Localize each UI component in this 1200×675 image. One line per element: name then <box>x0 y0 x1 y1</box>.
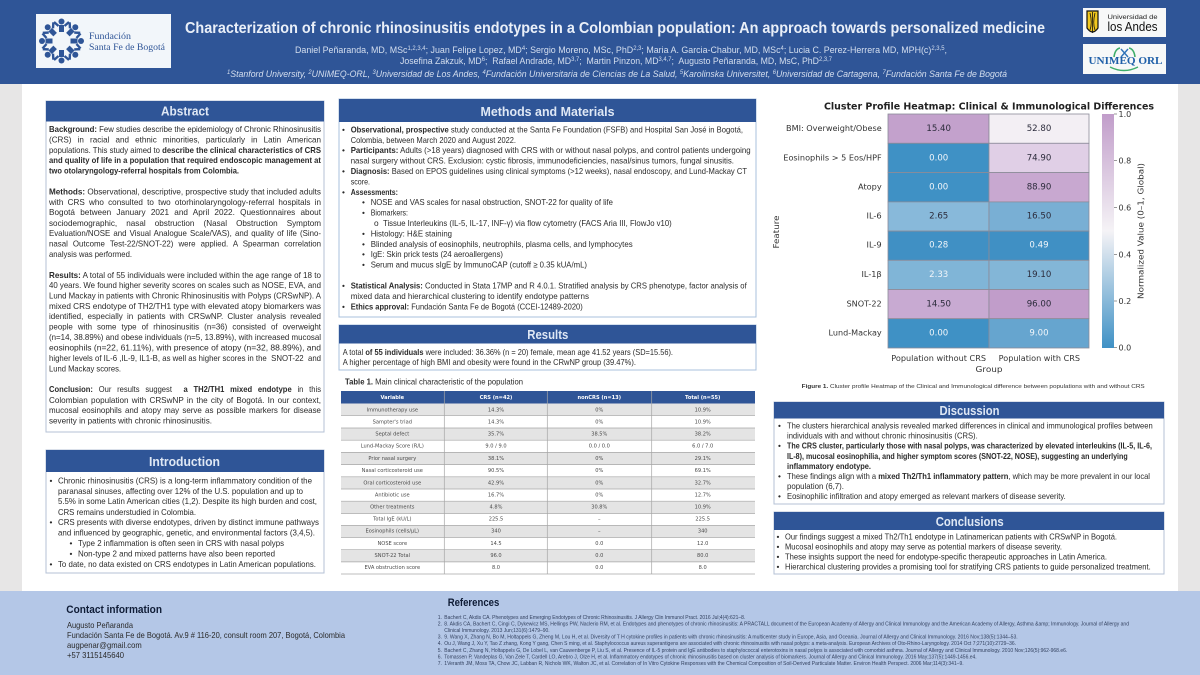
heading: results <box>339 325 756 344</box>
logo: UNIMEQ ORL <box>1083 44 1166 74</box>
axis labels: Group <box>976 365 1002 374</box>
table 1: main clinical characteristics: 225.5 <box>695 517 710 523</box>
heading: results: Results <box>527 327 568 342</box>
text: methods summary: nasal Outcome Test-22/SNOT-22) were applied. A Spearman correlation <box>49 238 321 248</box>
introduction bullets: Type 2 inflammation is often seen in CRS with nasal polyps <box>78 538 284 548</box>
heatmap values: 74.90 <box>1027 153 1051 163</box>
colour bar legend: 0.2 <box>1118 297 1131 306</box>
affiliations: Fundación Universitaria de Ciencias de La Salud, <box>486 69 680 79</box>
table caption: Table 1. Main clinical characteristic of the population <box>345 377 523 387</box>
text: results summary: mixed CRS endotype of TH2/TH1 type with elevated atopy biomarkers was <box>49 301 321 311</box>
discussion bullets: The CRS cluster, particularly those with nasal polyps, was characterized by elevated interleukins (IL-5, IL-6, <box>787 440 1152 450</box>
affiliations: 4 <box>482 70 486 76</box>
statistical analysis and ethics <box>342 280 747 312</box>
assessments sub-list: • <box>362 208 365 218</box>
heading: introduction: Introduction <box>149 454 220 469</box>
heading: abstract: Abstract <box>161 104 210 119</box>
text: results summary: Lund Mackay in patients with Chronic Rhinosinusitis with Polyps (CRSwNP). A <box>49 290 321 300</box>
table 1: main clinical characteristics: nonCRS (n=13) <box>578 395 621 401</box>
discussion bullets: IL-8), mucosal eosinophilia, and higher symptom scores (SNOT-22, NOSE), suggesting an underlying <box>787 451 1128 461</box>
table 1: main clinical characteristics: 38.1% <box>488 456 504 462</box>
introduction bullets: 5.5% in some Latin American cities (1,2). Despite its high burden and cost, <box>58 496 317 506</box>
table 1: main clinical characteristics: 69.1% <box>695 468 711 474</box>
assessments sub-list: • <box>362 197 365 207</box>
header banner <box>0 0 1200 84</box>
feature labels <box>783 124 882 338</box>
references: 7. <box>438 661 442 667</box>
methods bullets: Assessments: <box>351 187 398 197</box>
references: 4. <box>438 641 442 647</box>
introduction bullets: • <box>50 517 52 527</box>
authors: 4 <box>522 46 526 52</box>
authors: 2,3,7 <box>819 57 833 63</box>
table 1: main clinical characteristics: 29.1% <box>695 456 711 462</box>
logo: UNIMEQ ORL: UNIMEQ ORL <box>1088 56 1162 67</box>
text: results summary: eosinophils (n=22, 61.11%), with presence of atopy (n=32, 88.89%), and <box>49 342 321 352</box>
figure caption: Figure 1. Cluster profile Heatmap of the Clinical and Immunological difference between populations with and without CRS <box>802 384 1145 390</box>
affiliations: UNIMEQ-ORL, <box>312 69 372 79</box>
table 1: main clinical characteristics: NOSE score <box>378 541 407 547</box>
table 1: main clinical characteristics: Antibiotic use <box>375 492 410 498</box>
methods bullets: Colombia, between March 2020 and August 2022. <box>351 135 516 145</box>
affiliations: Stanford University, <box>230 69 308 79</box>
assessments sub-list: Histology: H&E staining <box>371 228 452 238</box>
assessments sub-list: • <box>362 260 365 270</box>
table 1: main clinical characteristics: Nasal corticosteroid use <box>362 468 423 474</box>
introduction bullets: Chronic rhinosinusitis (CRS) is a long-term inflammatory condition of the <box>58 476 312 486</box>
table 1: main clinical characteristics: 35.7% <box>488 432 504 438</box>
text: results summary: (n=14, 38.89%) and obese individuals (n=5, 13.89%), with increased mucosal <box>49 332 321 342</box>
table 1: main clinical characteristics: 14.3% <box>488 407 504 413</box>
conclusions bullets: Mucosal eosinophils and atopy may serve as potential markers of disease severity. <box>785 541 1062 551</box>
table 1: main clinical characteristics: Lund-Mackay Score (R/L) <box>361 444 424 450</box>
affiliations: Universidad de Los Andes, <box>376 69 482 79</box>
affiliations: Universidad de Cartagena, <box>776 69 883 79</box>
references: Tomassen P, Vandeplas G, Van Zele T, Cardell LO, Arebro J, Olze H, et al. Inflammatory endotypes of chronic rhinosinusitis based on cluster analysis of biomarkers. Journal of Allergy and Clinical Immunology. 2016 May;137(5):1449-1456.e4. <box>444 655 977 661</box>
methods bullets: nasal surgery without CRS. Exclusion: cystic fibrosis, immunodeficiencies, nasal/sinus tumors, fungal sinusitis. <box>351 156 734 166</box>
authors: , <box>945 45 947 55</box>
text: background: Background: Few studies describe the epidemiology of Chronic Rhinosinusitis <box>49 124 321 134</box>
colour bar legend: 0.4 <box>1118 250 1131 259</box>
table 1: main clinical characteristics: Prior nasal surgery <box>368 456 416 462</box>
table 1: main clinical characteristics: Total (n=55) <box>685 395 720 401</box>
panel: results <box>339 325 756 370</box>
colour bar legend: 0.6 <box>1118 204 1131 213</box>
title: Characterization of chronic rhinosinusitis endotypes in a Colombian population: An approach towards personalized medicine <box>185 20 1045 37</box>
results text: A higher percentage of high BMI and obesity were found in the CRwNP group (39.47%). <box>343 357 636 367</box>
results text <box>343 347 673 367</box>
authors: ; Maria A. Garcia-Chabur, MD, MSc <box>641 45 781 55</box>
heatmap cells <box>888 114 1089 348</box>
text: methods summary: Evaluation/NOSE and Visual Analogue Scale/VAS), and quality of life (Sino- <box>49 228 321 238</box>
colour bar legend: Normalized Value (0–1, Global) <box>1136 163 1146 299</box>
introduction bullets: • <box>50 476 52 486</box>
table 1: main clinical characteristics: 42.9% <box>488 480 504 486</box>
contact information: +57 3115145640 <box>67 650 124 660</box>
authors: 1,2,3,4 <box>408 46 426 52</box>
text: background: (CRS) in racial and ethnic minorities, particularly in Latin American <box>49 134 321 144</box>
references: Ou J, Wang J, Xu Y, Tao Z zhang, Kong Y gang, Chen S ming, et al. Staphylococcus aureus superantigens are associated with chronic rhinosinusitis with nasal polyps: a meta-analysis. European Archives of Oto-Rhino-Laryngology. 2014 Oct 7;271(10):2729–36. <box>444 641 1016 647</box>
table 1: main clinical characteristics: 0.0 / 0.0 <box>589 444 610 450</box>
methods bullets: • <box>342 145 345 155</box>
table 1: main clinical characteristics: 96.0 <box>490 553 502 559</box>
text: methods summary: with CRS who consulted to two otorhinolaryngology-referral hospitals in <box>48 197 321 207</box>
heading: introduction <box>46 450 324 472</box>
conclusions bullets: These insights support the need for endotype-specific therapeutic approaches in Latin America. <box>785 551 1107 561</box>
feature labels: Atopy <box>858 183 882 192</box>
methods bullets: • <box>342 187 345 197</box>
contact information: Fundación Santa Fe de Bogotá. Av.9 # 116-20, consult room 207, Bogotá, Colombia <box>67 630 345 640</box>
introduction bullets: To date, no data existed on CRS endotypes in Latin American populations. <box>58 559 316 569</box>
authors: 6 <box>482 57 486 63</box>
heading: methods and materials <box>339 99 756 122</box>
text: conclusion summary: severity in patients with chronic rhinosinusitis. <box>49 416 212 426</box>
table 1: main clinical characteristics: 12.7% <box>695 492 711 498</box>
panel: conclusions <box>774 512 1164 574</box>
table 1: main clinical characteristics: 14.3% <box>488 419 504 425</box>
authors: 4 <box>781 46 784 52</box>
authors: ; Sergio Moreno, MSc, PhD <box>525 45 634 55</box>
table 1: main clinical characteristics: 0% <box>595 456 603 462</box>
assessments sub-list: Biomarkers: <box>371 208 408 218</box>
references: Bachert C, Akdis CA. Phenotypes and Emerging Endotypes of Chronic Rhinosinusitis. J Allergy Clin Immunol Pract. 2016 Jul;4(4):621–8. <box>444 615 745 621</box>
feature labels: SNOT-22 <box>846 300 882 309</box>
references: Clinical Immunology. 2013 Jun;131(6):1479–90. <box>444 628 550 634</box>
heatmap values: 96.00 <box>1027 300 1051 310</box>
statistical analysis and ethics: mixed data and hierarchical clustering to identify endotype patterns <box>351 291 589 301</box>
references: 9. Wang X, Zhang N, Bo M, Holtappels G, Zheng M, Lou H, et al. Diversity of T H cytokine profiles in patients with chronic rhinosinusitis: A multicenter study in Europe, Asia, and Oceania. Journal of Allergy and Clinical Immunology. 2016 Nov;138(5):1344–53. <box>444 634 1018 640</box>
references: References <box>448 597 499 609</box>
table 1: main clinical characteristics: 4.8% <box>490 505 503 511</box>
logo: Universidad de los Andes <box>1083 8 1166 37</box>
panel: introduction <box>46 450 324 573</box>
references: 1Veranth JM, Moss TA, Chow JC, Labban R, Nichols WK, Walton JC, et al. Correlation of In Vitro Cytokine Responses with the Chemical Composition of Soil-Derived Particulate Matter. Environ Health Perspect. 2006 Mar;114(3):341–9. <box>444 661 964 667</box>
table 1: main clinical characteristics: 14.5 <box>490 541 502 547</box>
discussion bullets: Eosinophilic infiltration and atopy emerged as relevant markers of disease severity. <box>787 491 1066 501</box>
table 1: main clinical characteristics: 340 <box>491 529 501 535</box>
methods bullets: • <box>342 166 345 176</box>
logo: Fundación Santa Fe de Bogotá: Fundación <box>89 31 132 41</box>
introduction bullets <box>50 476 319 569</box>
table 1: main clinical characteristics: Immunotherapy use <box>367 407 418 413</box>
heatmap values: 19.10 <box>1027 270 1051 280</box>
heading: conclusions: Conclusions <box>936 514 1004 529</box>
table 1: main clinical characteristics: 340 <box>698 529 708 535</box>
methods bullets <box>342 124 751 197</box>
table 1: main clinical characteristics: 0% <box>595 407 603 413</box>
authors: 3,4,7 <box>659 57 672 63</box>
discussion bullets: • <box>778 420 781 430</box>
authors: Daniel Peñaranda, MD, MSc <box>295 45 409 55</box>
table 1: main clinical characteristics: 0.0 <box>595 553 603 559</box>
references <box>438 597 1129 667</box>
panel: discussion <box>774 402 1164 504</box>
table 1: main clinical characteristics: 16.7% <box>488 492 504 498</box>
heatmap values: 0.00 <box>929 153 948 163</box>
colour bar legend: 1.0 <box>1118 110 1131 119</box>
text: conclusion summary: mucosal eosinophils and atopy may serve as possible markers for disease <box>49 405 321 415</box>
table 1: main clinical characteristics: Variable <box>380 395 405 401</box>
table 1: main clinical characteristics: 38.2% <box>695 432 711 438</box>
heading: discussion: Discussion <box>940 403 1000 418</box>
side strip left <box>0 84 22 591</box>
text: conclusion summary: Colombian population with CRSwNP in the city of Bogotá. In our context, <box>49 395 321 405</box>
statistical analysis and ethics: Ethics approval: Fundación Santa Fe de Bogotá (CCEI-12489-2020) <box>351 302 583 312</box>
table 1: main clinical characteristics: 32.7% <box>695 480 711 486</box>
affiliations: 5 <box>680 70 684 76</box>
footer band <box>0 591 1200 675</box>
heatmap values: 2.33 <box>929 270 948 280</box>
text: methods summary: Bogotá between January 2021 and April 2022. Questionnaires about <box>49 207 322 217</box>
text: conclusion summary: Conclusion: Our results suggest a TH2/TH1 mixed endotype in this <box>49 384 321 394</box>
table 1: main clinical characteristics: 0% <box>595 468 603 474</box>
contact information: Contact information <box>66 604 162 616</box>
heatmap values: 0.28 <box>929 241 948 251</box>
feature labels: Lund-Mackay <box>828 329 882 338</box>
discussion bullets: • <box>778 440 781 450</box>
introduction bullets: • <box>70 538 72 548</box>
affiliations: 2 <box>307 70 312 76</box>
panel: abstract <box>46 101 324 432</box>
logo: Universidad de los Andes: Universidad de <box>1108 14 1158 21</box>
table 1: main clinical characteristics: Eosinophils (cells/µL) <box>366 529 419 535</box>
table 1: main clinical characteristics: Other treatments <box>370 505 415 511</box>
authors: Josefina Zakzuk, MD <box>400 56 484 66</box>
text: background: populations. This study aimed to describe the clinical characteristics of CRS <box>49 145 321 155</box>
table 1: main clinical characteristics: 225.5 <box>489 517 503 523</box>
contact information: Augusto Peñaranda <box>67 620 133 630</box>
affiliations: 7 <box>883 70 886 76</box>
heatmap values: 52.80 <box>1027 124 1051 134</box>
authors: 2,3 <box>633 46 642 52</box>
table 1: main clinical characteristics: 0.0 <box>595 541 603 547</box>
table 1: main clinical characteristics: Total IgE (kU/L) <box>372 517 411 523</box>
introduction bullets: • <box>50 559 52 569</box>
text: results summary: people with some type of rhinosinusitis (n=36) consisted of overweight <box>49 322 322 332</box>
text: results summary <box>49 270 322 374</box>
table 1: main clinical characteristics: 9.0 / 9.0 <box>485 444 507 450</box>
affiliations: Fundación Santa Fe de Bogotá <box>886 69 1007 79</box>
introduction bullets: CRS presents with diverse endotypes, driven by distinct immune pathways <box>58 517 319 527</box>
conclusions bullets: • <box>776 551 780 561</box>
table 1: main clinical characteristics: 6.0 / 7.0 <box>692 444 713 450</box>
affiliations: Karolinska Universitet, <box>683 69 773 79</box>
discussion bullets: inflammatory endotype. <box>787 461 871 471</box>
affiliations: 6 <box>773 70 777 76</box>
table 1: main clinical characteristics: 10.9% <box>695 505 711 511</box>
introduction bullets: and influenced by geographic, genetic, and environmental factors (3,4,5). <box>58 528 315 538</box>
side strip right <box>1178 84 1200 591</box>
references: 6. <box>438 655 442 661</box>
table 1: main clinical characteristics: CRS (n=42) <box>480 395 512 401</box>
text: results summary: 40 years. We found higher severity scores on scales such as NOSE, EVA, and <box>49 280 321 290</box>
text: methods summary: Methods: Observational, descriptive, prospective study that included adults <box>49 186 321 196</box>
feature labels: BMI: Overweight/Obese <box>786 124 882 133</box>
discussion bullets: population (6,7). <box>787 481 844 491</box>
table 1: main clinical characteristics: 0% <box>595 492 603 498</box>
results text: A total of 55 individuals were included: 36.36% (n = 20) female, mean age 41.52 years (SD=15.56). <box>343 347 673 357</box>
references: 8. Akdis CA, Bachert C, Cingi C, Dykewicz MS, Hellings PW, Naclerio RM, et al. Endotypes and phenotypes of chronic rhinosinusitis: A PRACTALL document of the European Academy of Allergy and Clinical Immunology and the American Academy of Allergy, Asthma &amp; Immunology. Journal of Allergy and <box>444 622 1129 628</box>
heatmap values: 14.50 <box>926 300 951 310</box>
table 1: main clinical characteristics: 0% <box>595 419 603 425</box>
text: conclusion summary <box>49 384 321 426</box>
table 1: main clinical characteristics: 90.5% <box>488 468 504 474</box>
authors: 2,3,5 <box>931 46 945 52</box>
affiliations: 3 <box>372 70 376 76</box>
methods bullets: Observational, prospective study conducted at the Santa Fe Foundation (FSFB) and Hospital San José in Bogotá, <box>351 124 743 134</box>
table 1: main clinical characteristics: 0.0 <box>595 565 603 571</box>
panel: methods and materials <box>339 99 756 317</box>
text: results summary: identified, especially in patients with CRSwNP. Cluster analysis revealed <box>49 311 321 321</box>
table 1: main clinical characteristics: Septal defect <box>375 432 409 438</box>
heading: methods and materials: Methods and Materials <box>480 104 614 119</box>
conclusions bullets: Our findings suggest a mixed Th2/Th1 endotype in Latinamerican patients with CRSwNP in Bogotá. <box>785 531 1117 541</box>
table 1: main clinical characteristics <box>341 391 755 574</box>
text: results summary: Lund Mackay scores. <box>49 364 121 374</box>
conclusions bullets: • <box>776 561 780 571</box>
heading: conclusions <box>774 512 1164 530</box>
heatmap values: 9.00 <box>1029 329 1049 339</box>
heading: abstract <box>46 101 324 122</box>
heatmap values: 0.00 <box>929 329 948 339</box>
feature labels: IL-1β <box>862 270 882 279</box>
axis labels: Population without CRS <box>891 354 986 363</box>
references: 1. <box>438 615 442 621</box>
affiliations: 1 <box>227 70 230 76</box>
table 1: main clinical characteristics: 0% <box>595 480 603 486</box>
conclusions bullets: Hierarchical clustering provides a promising tool for stratifying CRS patients to guide personalized treatment. <box>785 561 1151 571</box>
table 1: main clinical characteristics: SNOT-22 Total <box>375 553 410 559</box>
conclusions bullets <box>776 531 1151 571</box>
introduction bullets: CRS remains understudied in Colombia. <box>58 507 196 517</box>
references: Bachert C, Zhang N, Holtappels G, De Lobel L, van Cauwenberge P, Liu S, et al. Presence of IL-5 protein and IgE antibodies to staphylococcal enterotoxins in nasal polyps is associated with comorbid asthma. Journal of Allergy and Clinical Immunology. 2010 Nov;126(5):962-968.e6. <box>444 648 1067 654</box>
logo: Universidad de los Andes: los Andes <box>1108 19 1158 34</box>
assessments sub-list: Tissue Interleukins (IL-5, IL-17, INF-γ) via flow cytometry (FACS Aria III, FlowJo v10) <box>383 218 672 228</box>
statistical analysis and ethics: • <box>342 280 345 290</box>
feature labels: Eosinophils > 5 Eos/HPF <box>783 153 882 162</box>
feature labels: IL-9 <box>866 241 882 250</box>
text: background: and quality of life in a population that required endoscopic management at <box>49 155 321 165</box>
references: 3. <box>438 634 442 640</box>
introduction bullets: paranasal sinuses, affecting over 12% of the U.S. population and up to <box>58 486 303 496</box>
text: background <box>49 124 321 176</box>
text: results summary: higher levels of IL-6 ,IL-9, IL1-B, as well as higher scores in the SNOT-22 and <box>49 353 321 363</box>
introduction bullets: Non-type 2 and mixed patterns have also been reported <box>78 548 275 558</box>
table 1: main clinical characteristics: 8.0 <box>492 565 500 571</box>
authors: ; Lucia C. Perez-Herrera MD, MPH(c) <box>784 45 931 55</box>
table 1: main clinical characteristics: Oral corticosteroid use <box>363 480 421 486</box>
table 1: main clinical characteristics: 10.9% <box>695 407 711 413</box>
heatmap values: 16.50 <box>1027 212 1051 222</box>
conclusions bullets: • <box>776 531 780 541</box>
authors: 3,7 <box>571 57 580 63</box>
colour bar legend: 0.8 <box>1118 157 1131 166</box>
conclusions bullets: • <box>776 541 780 551</box>
assessments sub-list: Serum and mucus sIgE by ImmunoCAP (cutoff ≥ 0.35 kUA/mL) <box>371 260 587 270</box>
heatmap values: 0.00 <box>929 183 948 193</box>
discussion bullets: These findings align with a mixed Th2/Th1 inflammatory pattern, which may be more prevalent in our local <box>787 471 1150 481</box>
authors <box>295 45 947 66</box>
discussion bullets: • <box>778 491 781 501</box>
table 1: main clinical characteristics: 10.9% <box>695 419 711 425</box>
table 1: main clinical characteristics: – <box>598 529 601 535</box>
assessments sub-list: NOSE and VAS scales for nasal obstruction, SNOT-22 for quality of life <box>371 197 613 207</box>
assessments sub-list: o <box>374 218 379 228</box>
logo: Fundación Santa Fe de Bogotá: Santa Fe de Bogotá <box>89 42 165 52</box>
references: 2. <box>438 622 442 628</box>
heatmap values: 88.90 <box>1027 183 1051 193</box>
text: methods summary <box>48 186 322 259</box>
colour bar legend <box>1102 110 1146 353</box>
axis labels <box>772 215 1080 374</box>
assessments sub-list: Blinded analysis of eosinophils, neutrophils, plasma cells, and lymphocytes <box>371 239 633 249</box>
authors: ; Augusto Peñaranda, MD, MsC, PhD <box>672 56 819 66</box>
table 1: main clinical characteristics: 38.5% <box>591 432 608 438</box>
heatmap values: 15.40 <box>926 124 951 134</box>
methods bullets: • <box>342 124 345 134</box>
assessments sub-list <box>362 197 672 270</box>
axis labels: Feature <box>772 215 781 248</box>
statistical analysis and ethics: • <box>342 302 345 312</box>
introduction bullets: • <box>70 548 72 558</box>
text: results summary: Results: A total of 55 individuals were included within the age range of 18 to <box>49 270 321 280</box>
heading: discussion <box>774 402 1164 418</box>
table 1: main clinical characteristics: 8.0 <box>699 565 707 571</box>
table 1: main clinical characteristics: 80.0 <box>697 553 708 559</box>
heatmap values: 2.65 <box>929 212 948 222</box>
text: methods summary: analysis was performed. <box>49 249 132 259</box>
table 1: main clinical characteristics: 30.8% <box>591 505 608 511</box>
feature labels: IL-6 <box>866 212 882 221</box>
heatmap values: 0.49 <box>1029 241 1049 251</box>
chart: cluster profile heatmap <box>772 102 1154 374</box>
assessments sub-list: IgE: Skin prick tests (24 aeroallergens) <box>371 249 503 259</box>
table 1: main clinical characteristics: EVA obstruction score <box>364 565 420 571</box>
authors: ; Juan Felipe Lopez, MD <box>426 45 522 55</box>
statistical analysis and ethics: Statistical Analysis: Conducted in Stata 17MP and R 4.0.1. Stratified analysis by CRS phenotype, factor analysis of <box>351 280 747 290</box>
contact information: augpenar@gmail.com <box>67 640 142 650</box>
axis labels: Population with CRS <box>999 354 1080 363</box>
methods bullets: Participants: Adults (>18 years) diagnosed with CRS with or without nasal polyps, and control patients undergoing <box>351 145 751 155</box>
discussion bullets: The clusters hierarchical analysis revealed marked differences in clinical and immunological profiles between <box>787 420 1153 430</box>
discussion bullets: • <box>778 471 781 481</box>
table 1: main clinical characteristics: Sampter's triad <box>373 419 412 425</box>
discussion bullets <box>778 420 1153 501</box>
discussion bullets: individuals with and without chronic rhinosinusitis (CRS). <box>787 430 978 440</box>
authors: ; Rafael Andrade, MD <box>485 56 572 66</box>
text: background: two otolaryngology-referral hospitals from Colombia. <box>49 166 239 176</box>
methods bullets: Diagnosis: Based on EPOS guidelines using clinical symptoms (>12 weeks), nasal endoscopy, and Lund-Mackay CT <box>351 166 747 176</box>
assessments sub-list: • <box>362 239 365 249</box>
references: 5. <box>438 648 442 654</box>
assessments sub-list: • <box>362 249 365 259</box>
text: methods summary: sociodemographic, nasal obstruction (Nasal Obstruction Symptom <box>49 218 321 228</box>
contact information <box>66 604 345 660</box>
colour bar legend: 0.0 <box>1118 344 1131 353</box>
methods bullets: score. <box>351 176 370 186</box>
logo: Fundación Santa Fe de Bogotá <box>36 14 171 68</box>
table 1: main clinical characteristics: 12.0 <box>697 541 708 547</box>
assessments sub-list: • <box>362 228 365 238</box>
table 1: main clinical characteristics: – <box>598 517 601 523</box>
chart title: Cluster Profile Heatmap: Clinical & Immunological Differences <box>824 102 1154 112</box>
heatmap values <box>926 124 1051 339</box>
authors: ; Martin Pinzon, MD <box>579 56 659 66</box>
